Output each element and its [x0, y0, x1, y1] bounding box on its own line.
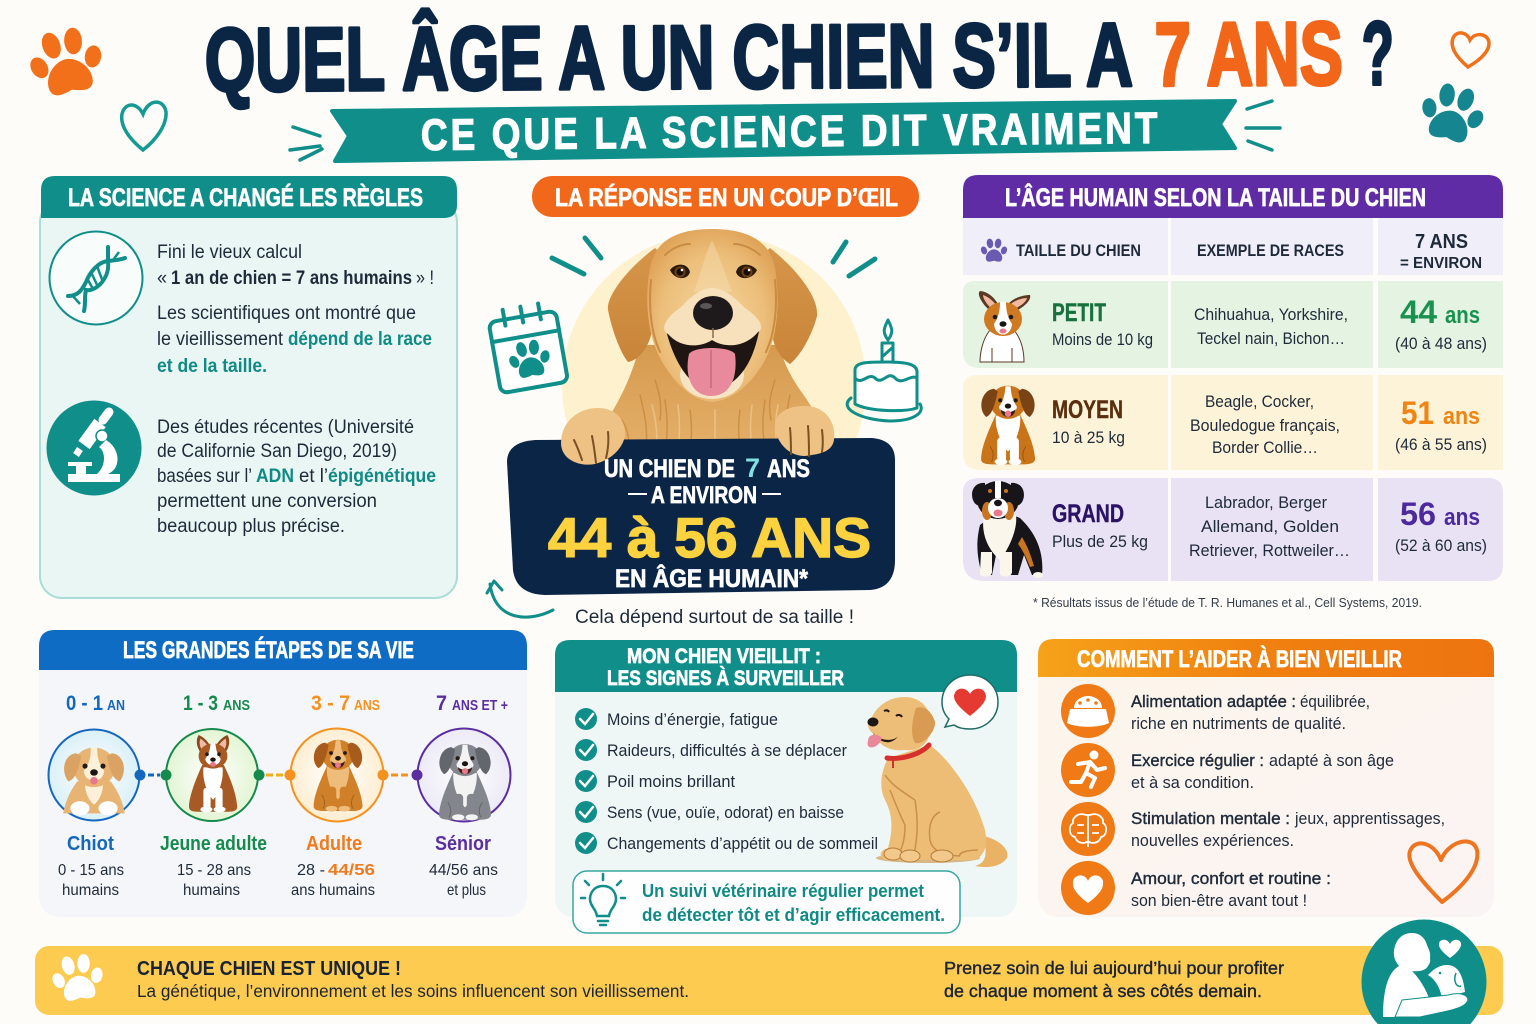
footer banner	[35, 920, 1503, 1024]
title: ?	[1362, 4, 1394, 104]
dog mouth	[666, 326, 760, 386]
row: petit: Chihuahua, Yorkshire,	[1194, 305, 1348, 324]
callout: suivi vétérinaire: Un suivi vétérinaire régulier permet	[642, 881, 924, 901]
checklist	[575, 708, 878, 854]
sparkle lines	[552, 238, 875, 276]
stage: adulte	[290, 692, 384, 899]
dog muzzle	[664, 288, 761, 345]
panel header	[41, 176, 457, 218]
text block: vieux calcul: Fini le vieux calcul	[157, 242, 302, 263]
row: moyen: MOYEN	[1052, 396, 1123, 424]
signs header: LES SIGNES À SURVEILLER	[607, 667, 844, 690]
column heads: TAILLE DU CHIEN	[1016, 241, 1141, 260]
stage: jeune adulte: humains	[183, 882, 240, 899]
row: moyen: (46 à 55 ans)	[1395, 435, 1487, 454]
caption: cela dépend: Cela dépend surtout de sa taille !	[575, 607, 854, 628]
heading: la réponse en un coup d'oeil	[532, 176, 919, 217]
stage: chiot: AN	[107, 697, 125, 714]
footer text left: La génétique, l’environnement et les soins influencent son vieillissement.	[137, 981, 689, 1001]
row: grand	[963, 478, 1503, 581]
column heads: = ENVIRON	[1400, 255, 1482, 272]
row: grand: Plus de 25 kg	[1052, 532, 1148, 551]
dog ears	[608, 248, 817, 364]
stage: chiot: Chiot	[67, 833, 114, 855]
decorative icon: orange heart outline	[1452, 33, 1489, 67]
icon: microscope	[46, 400, 142, 496]
row: grand: ans	[1444, 504, 1480, 531]
item: stimulation: nouvelles expériences.	[1131, 831, 1294, 850]
footnote: * Résultats issus de l’étude de T. R. Humanes et al., Cell Systems, 2019.	[1033, 596, 1422, 610]
decorative icon: orange paw	[21, 21, 111, 100]
stage: chiot	[48, 692, 140, 899]
text block: vieux calcul: » !	[416, 268, 434, 289]
panel: mon chien vieillit	[555, 640, 1017, 933]
panel: âge humain selon la taille	[963, 175, 1503, 581]
row: moyen: 51	[1401, 395, 1434, 431]
navy answer panel: 7	[745, 453, 760, 483]
item: exercice: adapté à son âge	[1269, 751, 1394, 770]
text block: études récentes: beaucoup plus précise.	[157, 516, 345, 537]
illustration: golden retriever with sign	[507, 229, 895, 595]
item: stimulation: Stimulation mentale :	[1131, 809, 1290, 828]
text block: études récentes	[157, 417, 436, 537]
text block: études récentes: basées sur l’	[157, 466, 252, 487]
dog paws	[561, 406, 834, 465]
icon: orange heart outline	[1409, 841, 1477, 902]
illustration: sitting golden dog	[868, 697, 1008, 867]
stage: jeune adulte: Jeune adulte	[160, 833, 267, 855]
panel: les grandes étapes de sa vie	[39, 630, 527, 917]
item: alimentation: Alimentation adaptée :	[1131, 692, 1296, 711]
stage: sénior: 7	[436, 692, 447, 715]
row: grand: Labrador, Berger	[1205, 493, 1327, 512]
text block: vieux calcul: 1 an de chien = 7 ans humains	[171, 268, 412, 289]
decorative icon: teal paw	[1413, 77, 1492, 148]
item: exercice: Exercice régulier :	[1131, 751, 1264, 770]
arrow	[487, 581, 553, 617]
text block: études récentes: permettent une conversion	[157, 491, 377, 512]
icon: white paw	[47, 951, 108, 1003]
text block: vieux calcul: le vieillissement	[157, 329, 284, 350]
item: exercice: et à sa condition.	[1131, 773, 1254, 792]
dog: moyen	[981, 386, 1035, 465]
stage: adulte: 3 - 7	[311, 692, 350, 715]
stage: sénior	[418, 692, 510, 899]
dog body	[600, 345, 825, 452]
text block: vieux calcul: Les scientifiques ont montré que	[157, 303, 416, 324]
stage: adulte: ans humains	[291, 882, 375, 899]
checklist: Changements d’appétit ou de sommeil	[607, 834, 878, 853]
subtitle ribbon: CE QUE LA SCIENCE DIT VRAIMENT	[421, 103, 1158, 160]
table header	[963, 175, 1503, 218]
text block: études récentes: Des études récentes (Université	[157, 417, 414, 438]
stage: sénior: 44/56 ans	[429, 862, 498, 879]
item: amour: son bien-être avant tout !	[1131, 891, 1307, 910]
item: alimentation: équilibrée,	[1300, 692, 1370, 711]
title: QUEL ÂGE A UN CHIEN S’IL A	[205, 4, 1133, 111]
row: petit: PETIT	[1052, 299, 1106, 327]
navy answer panel: EN ÂGE HUMAIN*	[615, 563, 808, 593]
stage: sénior: et plus	[447, 882, 486, 899]
row: petit: Moins de 10 kg	[1052, 330, 1153, 349]
panel: la science a changé les règles	[40, 176, 457, 598]
speech bubble with heart	[942, 675, 998, 729]
icon: DNA	[50, 232, 142, 324]
dog head	[647, 229, 778, 402]
row: petit: Teckel nain, Bichon…	[1197, 329, 1345, 348]
stage: jeune adulte: 15 - 28 ans	[177, 862, 251, 879]
text block: vieux calcul	[157, 242, 434, 377]
dog: grand	[972, 481, 1043, 578]
text block: vieux calcul: dépend de la race	[288, 329, 432, 350]
signs header	[555, 640, 1017, 692]
row: moyen: ans	[1443, 403, 1480, 430]
row: moyen	[963, 375, 1503, 470]
stages header	[39, 630, 527, 670]
footer text left	[137, 958, 689, 1001]
callout: suivi vétérinaire	[573, 871, 960, 933]
icon: birthday cake	[847, 320, 921, 421]
row: moyen: Border Collie…	[1212, 438, 1318, 457]
row: petit: ans	[1445, 302, 1480, 329]
stage: adulte: 28 -	[297, 862, 325, 879]
stage: chiot: humains	[62, 882, 119, 899]
stage: sénior: Sénior	[435, 833, 491, 855]
checklist: Sens (vue, ouïe, odorat) en baisse	[607, 803, 844, 822]
item: exercice	[1061, 743, 1394, 797]
dog nose and eyes	[670, 265, 757, 338]
row: moyen: 10 à 25 kg	[1052, 428, 1125, 447]
stage: sénior: ANS ET +	[452, 697, 508, 714]
signs header: MON CHIEN VIEILLIT :	[627, 645, 821, 668]
row: petit: 44	[1400, 294, 1437, 330]
panel header: LA SCIENCE A CHANGÉ LES RÈGLES	[68, 183, 423, 212]
row: grand: Allemand, Golden	[1201, 517, 1339, 536]
icon: calendar	[487, 301, 568, 393]
checklist: Poil moins brillant	[607, 772, 735, 791]
dog: petit	[979, 291, 1030, 362]
footer text left: CHAQUE CHIEN EST UNIQUE !	[137, 958, 401, 980]
footer text right: de chaque moment à ses côtés demain.	[944, 981, 1262, 1001]
checklist: Moins d’énergie, fatigue	[607, 710, 778, 729]
item: stimulation	[1061, 802, 1445, 856]
help header: COMMENT L’AIDER À BIEN VIEILLIR	[1077, 645, 1402, 673]
navy answer panel	[507, 438, 895, 595]
help header	[1038, 639, 1494, 677]
stage: chiot: 0 - 1	[66, 692, 103, 715]
row: moyen: Bouledogue français,	[1190, 416, 1340, 435]
row: moyen: Beagle, Cocker,	[1205, 392, 1314, 411]
item: alimentation: riche en nutriments de qualité.	[1131, 714, 1346, 733]
table header: L’ÂGE HUMAIN SELON LA TAILLE DU CHIEN	[1005, 182, 1426, 212]
text block: études récentes: et l’	[299, 466, 328, 487]
text block: vieux calcul: «	[157, 268, 167, 289]
column heads: EXEMPLE DE RACES	[1197, 241, 1344, 260]
item: alimentation	[1061, 684, 1370, 738]
item: amour: Amour, confort et routine :	[1131, 869, 1331, 888]
navy answer panel: A ENVIRON	[651, 482, 757, 509]
checklist: Raideurs, difficultés à se déplacer	[607, 741, 847, 760]
title: 7 ANS	[1155, 4, 1343, 106]
stages header: LES GRANDES ÉTAPES DE SA VIE	[123, 636, 414, 664]
footer text right: Prenez soin de lui aujourd’hui pour profiter	[944, 958, 1284, 978]
icon: person hugging dog	[1362, 920, 1486, 1024]
decorative icon: teal heart outline	[122, 102, 166, 150]
stage: jeune adulte	[160, 692, 267, 899]
callout: suivi vétérinaire: de détecter tôt et d’agir efficacement.	[642, 905, 945, 925]
stage: adulte: ANS	[354, 697, 380, 714]
navy answer panel: ANS	[767, 455, 810, 483]
stage: chiot: 0 - 15 ans	[58, 862, 124, 879]
row: grand: GRAND	[1052, 500, 1124, 528]
panel: comment l'aider à bien vieillir	[1038, 639, 1494, 917]
stage: jeune adulte: ANS	[223, 697, 250, 714]
stage: jeune adulte: 1 - 3	[183, 692, 218, 715]
text block: vieux calcul: et de la taille.	[157, 356, 267, 377]
item: stimulation: jeux, apprentissages,	[1294, 809, 1445, 828]
column heads	[963, 218, 1503, 275]
footer text right	[944, 958, 1284, 1001]
row: petit	[963, 281, 1503, 368]
timeline connectors	[134, 770, 422, 780]
heading: la réponse en un coup d'oeil: LA RÉPONSE EN UN COUP D’ŒIL	[555, 183, 898, 212]
dog lower jaw	[680, 351, 744, 399]
text block: études récentes: épigénétique	[328, 466, 436, 487]
navy answer panel: UN CHIEN DE	[604, 455, 735, 483]
text block: études récentes: de Californie San Diego, 2019)	[157, 441, 397, 462]
stage: adulte: 44/56	[328, 862, 375, 879]
row: petit: (40 à 48 ans)	[1395, 334, 1487, 353]
navy answer panel: 44 à 56 ANS	[548, 506, 871, 569]
stage: adulte: Adulte	[306, 833, 362, 855]
dog tongue	[688, 348, 736, 396]
row: grand: (52 à 60 ans)	[1395, 536, 1487, 555]
column heads: 7 ANS	[1415, 231, 1468, 253]
item: amour	[1061, 861, 1331, 915]
text block: études récentes: ADN	[256, 466, 294, 487]
row: grand: Retriever, Rottweiler…	[1189, 541, 1350, 560]
row: grand: 56	[1400, 496, 1436, 532]
